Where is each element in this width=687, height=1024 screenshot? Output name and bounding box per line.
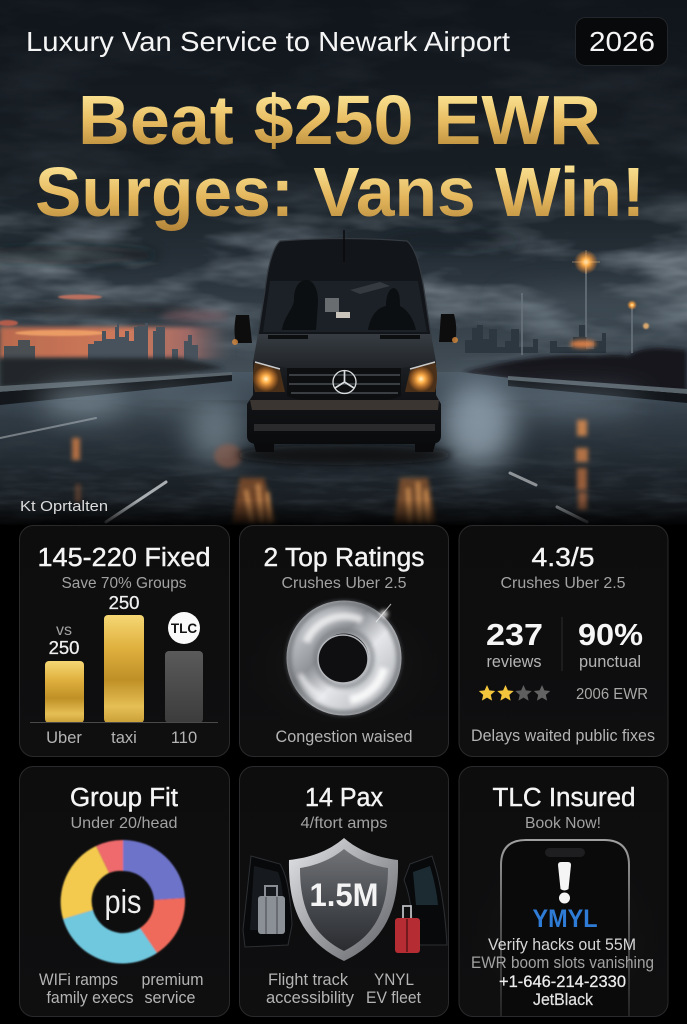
bar chart: 250 — [49, 637, 79, 658]
road ripple texture — [0, 400, 687, 525]
subheading: 4/ftort amps — [300, 815, 388, 832]
stat: reviews: reviews — [486, 653, 542, 671]
donut chart — [61, 840, 185, 963]
feature labels: EV fleet — [366, 989, 421, 1007]
feature labels: YNYL — [374, 971, 414, 989]
stat: reviews — [486, 617, 543, 671]
stat: punctual: punctual — [579, 653, 641, 671]
stat: punctual — [578, 617, 643, 671]
caption: Congestion waised — [276, 728, 412, 746]
heading: TLC Insured — [492, 784, 636, 812]
feature labels: premium — [142, 971, 204, 989]
bar chart: vs — [56, 622, 72, 639]
mercedes star emblem — [333, 370, 356, 394]
heading: 14 Pax — [305, 784, 383, 812]
street lamps — [522, 250, 637, 355]
heading: 4.3/5 — [532, 544, 594, 572]
subheading: Crushes Uber 2.5 — [500, 575, 626, 592]
van bumper — [250, 400, 439, 431]
van shadow — [236, 445, 452, 465]
feature labels: Flight track — [268, 971, 349, 989]
icon: chrome ring — [289, 603, 399, 713]
lane markings — [0, 418, 587, 522]
left headlight — [253, 362, 285, 392]
subheading: Crushes Uber 2.5 — [282, 575, 407, 592]
feature labels: WIFi ramps — [39, 971, 118, 989]
feature labels: service — [144, 989, 196, 1007]
road reflections of lights — [72, 420, 588, 524]
subheading: Book Now! — [525, 815, 601, 832]
hero bottom fade — [0, 500, 687, 528]
van vents — [268, 335, 420, 339]
icon: steel shield — [289, 838, 398, 961]
subheading: Under 20/head — [70, 815, 178, 832]
icon: phone — [501, 840, 629, 1024]
van tyres — [250, 430, 439, 452]
heading: Group Fit — [70, 784, 178, 812]
icon: TLC badge: TLC — [171, 621, 197, 636]
year badge — [576, 18, 668, 66]
left tree line — [0, 358, 225, 388]
van antenna — [343, 230, 345, 262]
sunset glow — [0, 294, 235, 359]
donut centre label: pis — [104, 883, 142, 920]
bar chart: taxi — [111, 729, 137, 747]
main title: Beat $250 EWR — [78, 81, 601, 159]
subheading: Save 70% Groups — [62, 575, 186, 592]
hero photo: van on wet highway at dusk — [0, 0, 687, 528]
stat: reviews: 237 — [486, 617, 543, 652]
right tree line — [462, 348, 687, 394]
panel: top ratings — [240, 526, 448, 756]
panel: fixed price bar chart — [20, 526, 230, 756]
icon: TLC badge — [168, 612, 200, 644]
hero caption: Kt Oprtalten — [20, 498, 108, 515]
right city skyline — [465, 323, 649, 353]
call to action text — [471, 936, 654, 1009]
heading: 2 Top Ratings — [264, 544, 424, 572]
icon: open van door with red suitcase — [395, 856, 447, 953]
shield value: 1.5M — [310, 877, 378, 913]
icon: star rating — [479, 685, 550, 701]
van windshield — [263, 280, 427, 332]
call to action text: JetBlack — [533, 991, 594, 1009]
van hood — [253, 334, 436, 378]
heading: 145-220 Fixed — [38, 544, 210, 572]
header line: Luxury Van Service to Newark Airport — [26, 26, 510, 57]
feature labels — [39, 971, 204, 1007]
panel: passenger capacity shield — [240, 766, 448, 1016]
feature labels: accessibility — [266, 989, 355, 1007]
label: year and airport: 2006 EWR — [576, 686, 648, 703]
panel: TLC insured call to action — [459, 766, 668, 1024]
right headlight — [405, 362, 437, 392]
icon: exclamation mark — [558, 862, 571, 904]
feature labels: family execs — [46, 989, 134, 1007]
wet road — [0, 372, 687, 525]
van upper cab — [258, 238, 431, 336]
stat: punctual: 90% — [578, 617, 643, 652]
panel: group fit donut — [20, 766, 230, 1016]
bar chart: 110 — [171, 729, 197, 747]
call to action text: Verify hacks out 55M — [488, 936, 636, 954]
YMYL label: YMYL — [532, 905, 598, 933]
guard rails — [0, 372, 687, 405]
luxury black van — [232, 230, 458, 465]
main title — [35, 81, 645, 231]
van grille — [287, 368, 401, 404]
stormy sky — [0, 0, 687, 390]
call to action text: +1-646-214-2330 — [499, 973, 626, 991]
caption: Delays waited public fixes — [471, 727, 655, 745]
left city skyline — [4, 323, 198, 375]
panel: rating stats — [459, 526, 668, 756]
year badge: 2026 — [589, 26, 655, 57]
van mirrors — [232, 314, 458, 345]
feature labels — [266, 971, 421, 1007]
van lower body — [247, 362, 441, 444]
road spray mist — [39, 383, 645, 467]
bar chart: Uber — [46, 729, 82, 747]
bar chart — [30, 592, 218, 747]
call to action text: EWR boom slots vanishing — [471, 954, 654, 972]
main title: Surges: Vans Win! — [35, 153, 645, 231]
bar chart: 250 — [109, 592, 139, 613]
icon: open van door with grey suitcase — [243, 856, 292, 947]
